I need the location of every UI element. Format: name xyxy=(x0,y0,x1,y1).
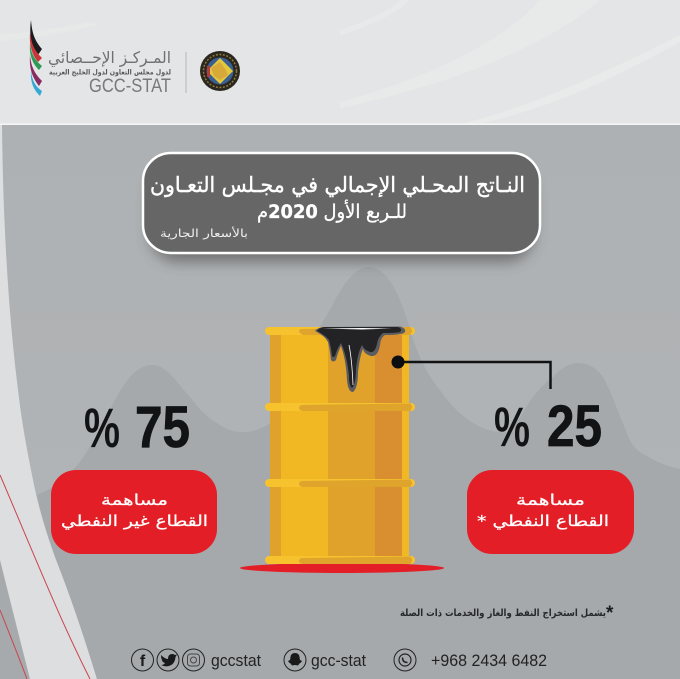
red puddle xyxy=(240,563,444,573)
label line 1: مساهمة xyxy=(516,491,585,509)
logo Arabic name: المـركـز الإحــصائي xyxy=(48,48,171,68)
stat: 25 percent xyxy=(494,394,602,459)
panel: non-oil sector contribution xyxy=(51,470,217,554)
stat: 25 percent: 25 xyxy=(547,394,602,459)
handle: gccstat: gccstat xyxy=(211,651,261,670)
oil barrel xyxy=(240,326,444,573)
icon: ribbon xyxy=(30,20,42,96)
logo: GCC-STAT xyxy=(30,20,240,97)
footer contacts xyxy=(132,649,547,671)
mountain silhouettes xyxy=(37,267,680,679)
connector from barrel to 25 percent xyxy=(392,356,550,389)
header band xyxy=(0,0,680,125)
stat: 75 percent: % xyxy=(84,396,120,459)
label line 2: القطاع النفطي * xyxy=(477,512,609,531)
handle: gcc-stat: gcc-stat xyxy=(311,651,366,670)
logo Arabic subtitle: لدول مجلس التعاون لدول الخليج العربية xyxy=(49,68,171,76)
oil spill xyxy=(315,326,405,392)
logo GCC-STAT wordmark: GCC-STAT xyxy=(89,76,171,97)
panel: oil sector contribution xyxy=(467,470,634,554)
label line 2: القطاع غير النفطي xyxy=(61,512,208,531)
icon: twitter xyxy=(157,649,179,671)
icon: GCC emblem xyxy=(200,51,240,91)
icon: instagram xyxy=(182,649,204,671)
title box xyxy=(143,153,540,262)
barrel rims xyxy=(265,327,415,564)
lower-left curved band with red lines xyxy=(0,475,90,679)
icon: facebook: f xyxy=(140,653,146,670)
stat: 25 percent: % xyxy=(494,395,530,458)
stat: 75 percent: 75 xyxy=(135,395,190,460)
title line 1: النـاتج المحـلي الإجمالي في مجـلس التعـاون xyxy=(150,173,525,197)
barrel body xyxy=(270,331,409,564)
footnote xyxy=(400,603,614,624)
label line 1: مساهمة xyxy=(101,491,168,509)
icon: snapchat xyxy=(284,649,306,671)
asterisk: * xyxy=(606,603,614,624)
phone number: +968 2434 6482 xyxy=(431,651,547,670)
stat: 75 percent xyxy=(84,395,190,460)
subtitle: current prices: بالأسعار الجارية xyxy=(160,226,248,240)
footnote: يشمل استخراج النفط والغاز والخدمات ذات الصلة xyxy=(400,608,606,619)
icon: facebook xyxy=(132,649,154,671)
title line 2: للـربع الأول 2020م xyxy=(257,200,407,223)
icon: whatsapp xyxy=(394,649,416,671)
